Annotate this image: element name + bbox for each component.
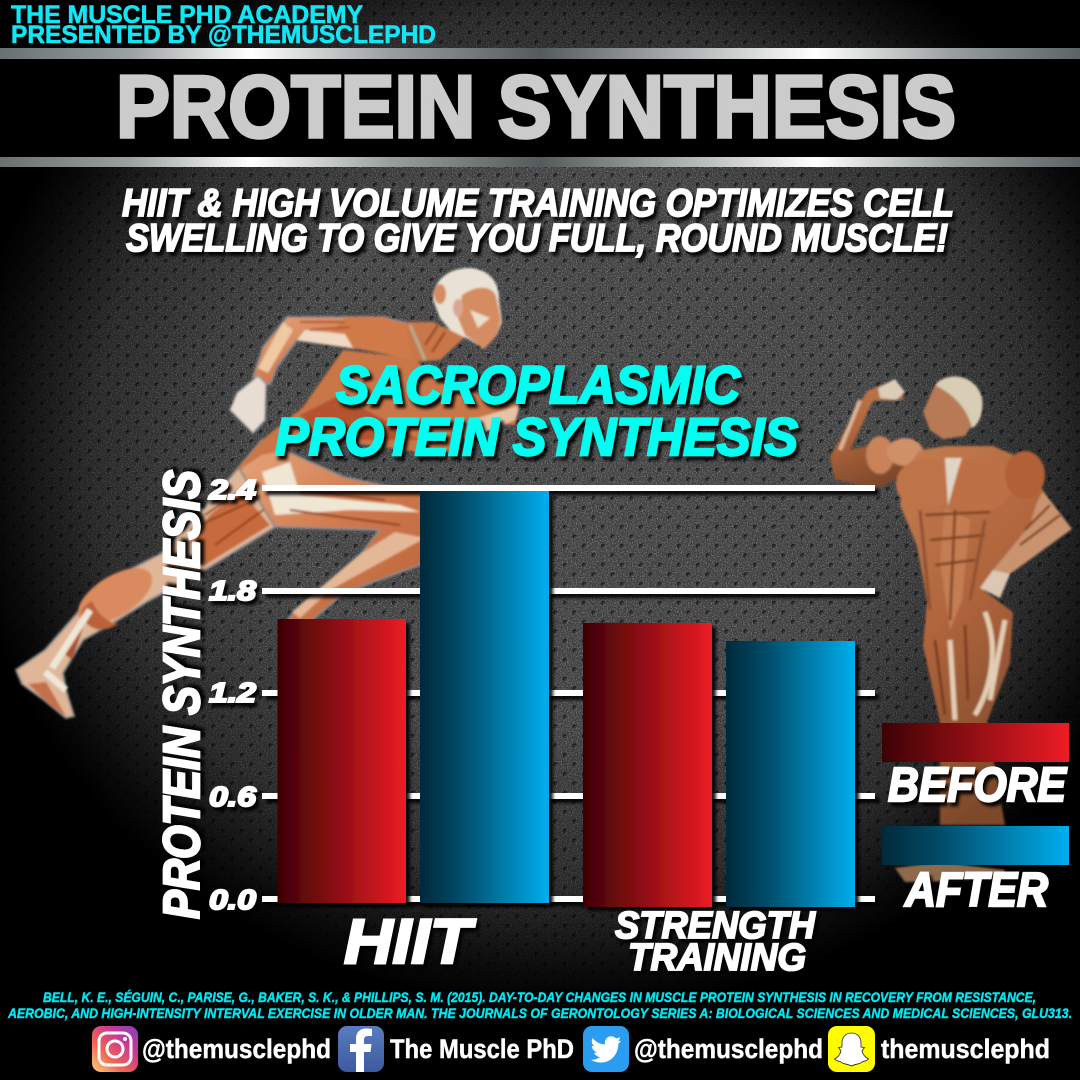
category label: HIIT: HIIT [344,907,476,977]
bar: strength before [583,623,712,907]
icon: twitter [583,1026,629,1072]
y axis ticks: 0.0 [209,884,256,915]
fist [878,379,905,400]
illustration: running muscular figure [16,268,520,718]
chart heading: SACROPLASMIC [336,356,741,415]
handle: instagram: @themusclephd [142,1034,331,1064]
subtitle: SWELLING TO GIVE YOU FULL, ROUND MUSCLE! [126,217,948,260]
chart heading: PROTEIN SYNTHESIS [275,408,798,467]
legend swatch: after [882,826,1069,865]
title banner [0,48,1080,167]
category label: strength training: TRAINING [628,937,806,979]
runner arm [253,317,415,385]
y axis title: PROTEIN SYNTHESIS [153,470,210,919]
header label [11,1,436,49]
subtitle: HIIT & HIGH VOLUME TRAINING OPTIMIZES CELL [122,182,954,225]
title: PROTEIN SYNTHESIS [116,57,956,156]
handle: twitter: @themusclephd [634,1034,823,1064]
bar: HIIT before [278,619,406,903]
runner front leg [240,440,425,622]
chart heading [275,356,798,467]
icon: snapchat [828,1026,875,1072]
bar chart [153,470,875,979]
y axis ticks: 1.8 [209,575,256,606]
flexed arm [830,381,923,488]
head [923,376,982,439]
runner head [433,268,502,349]
foot [895,862,1005,882]
social media row [92,1026,1050,1072]
forearm [980,491,1072,598]
runner rear leg [16,440,300,718]
category label: strength training: STRENGTH [615,905,816,947]
y axis ticks: 0.6 [209,781,256,812]
runner hand [230,376,266,433]
citation [7,989,1072,1021]
subtitle [122,182,954,260]
header label: PRESENTED BY @THEMUSCLEPHD [11,21,436,49]
y axis ticks [208,474,256,915]
runner torso [234,350,520,473]
header label: THE MUSCLE PHD ACADEMY [11,1,363,29]
legend label: after: AFTER [904,864,1048,917]
handle: facebook: The Muscle PhD [390,1034,574,1064]
legend swatch: before [882,723,1069,762]
runner neck [405,322,465,362]
bar: HIIT after [420,491,549,903]
icon: facebook [338,1026,384,1072]
grid lines [262,485,875,902]
bar: strength after [726,641,855,907]
illustration: flexing muscular figure [830,376,1072,882]
category label: strength training [615,905,816,979]
legend [882,723,1069,917]
y axis ticks: 1.2 [209,677,256,708]
icon: instagram [92,1026,138,1072]
y axis ticks: 2.4 [208,474,256,505]
torso and legs [896,446,1045,825]
handle: snapchat: themusclephd [881,1034,1050,1064]
